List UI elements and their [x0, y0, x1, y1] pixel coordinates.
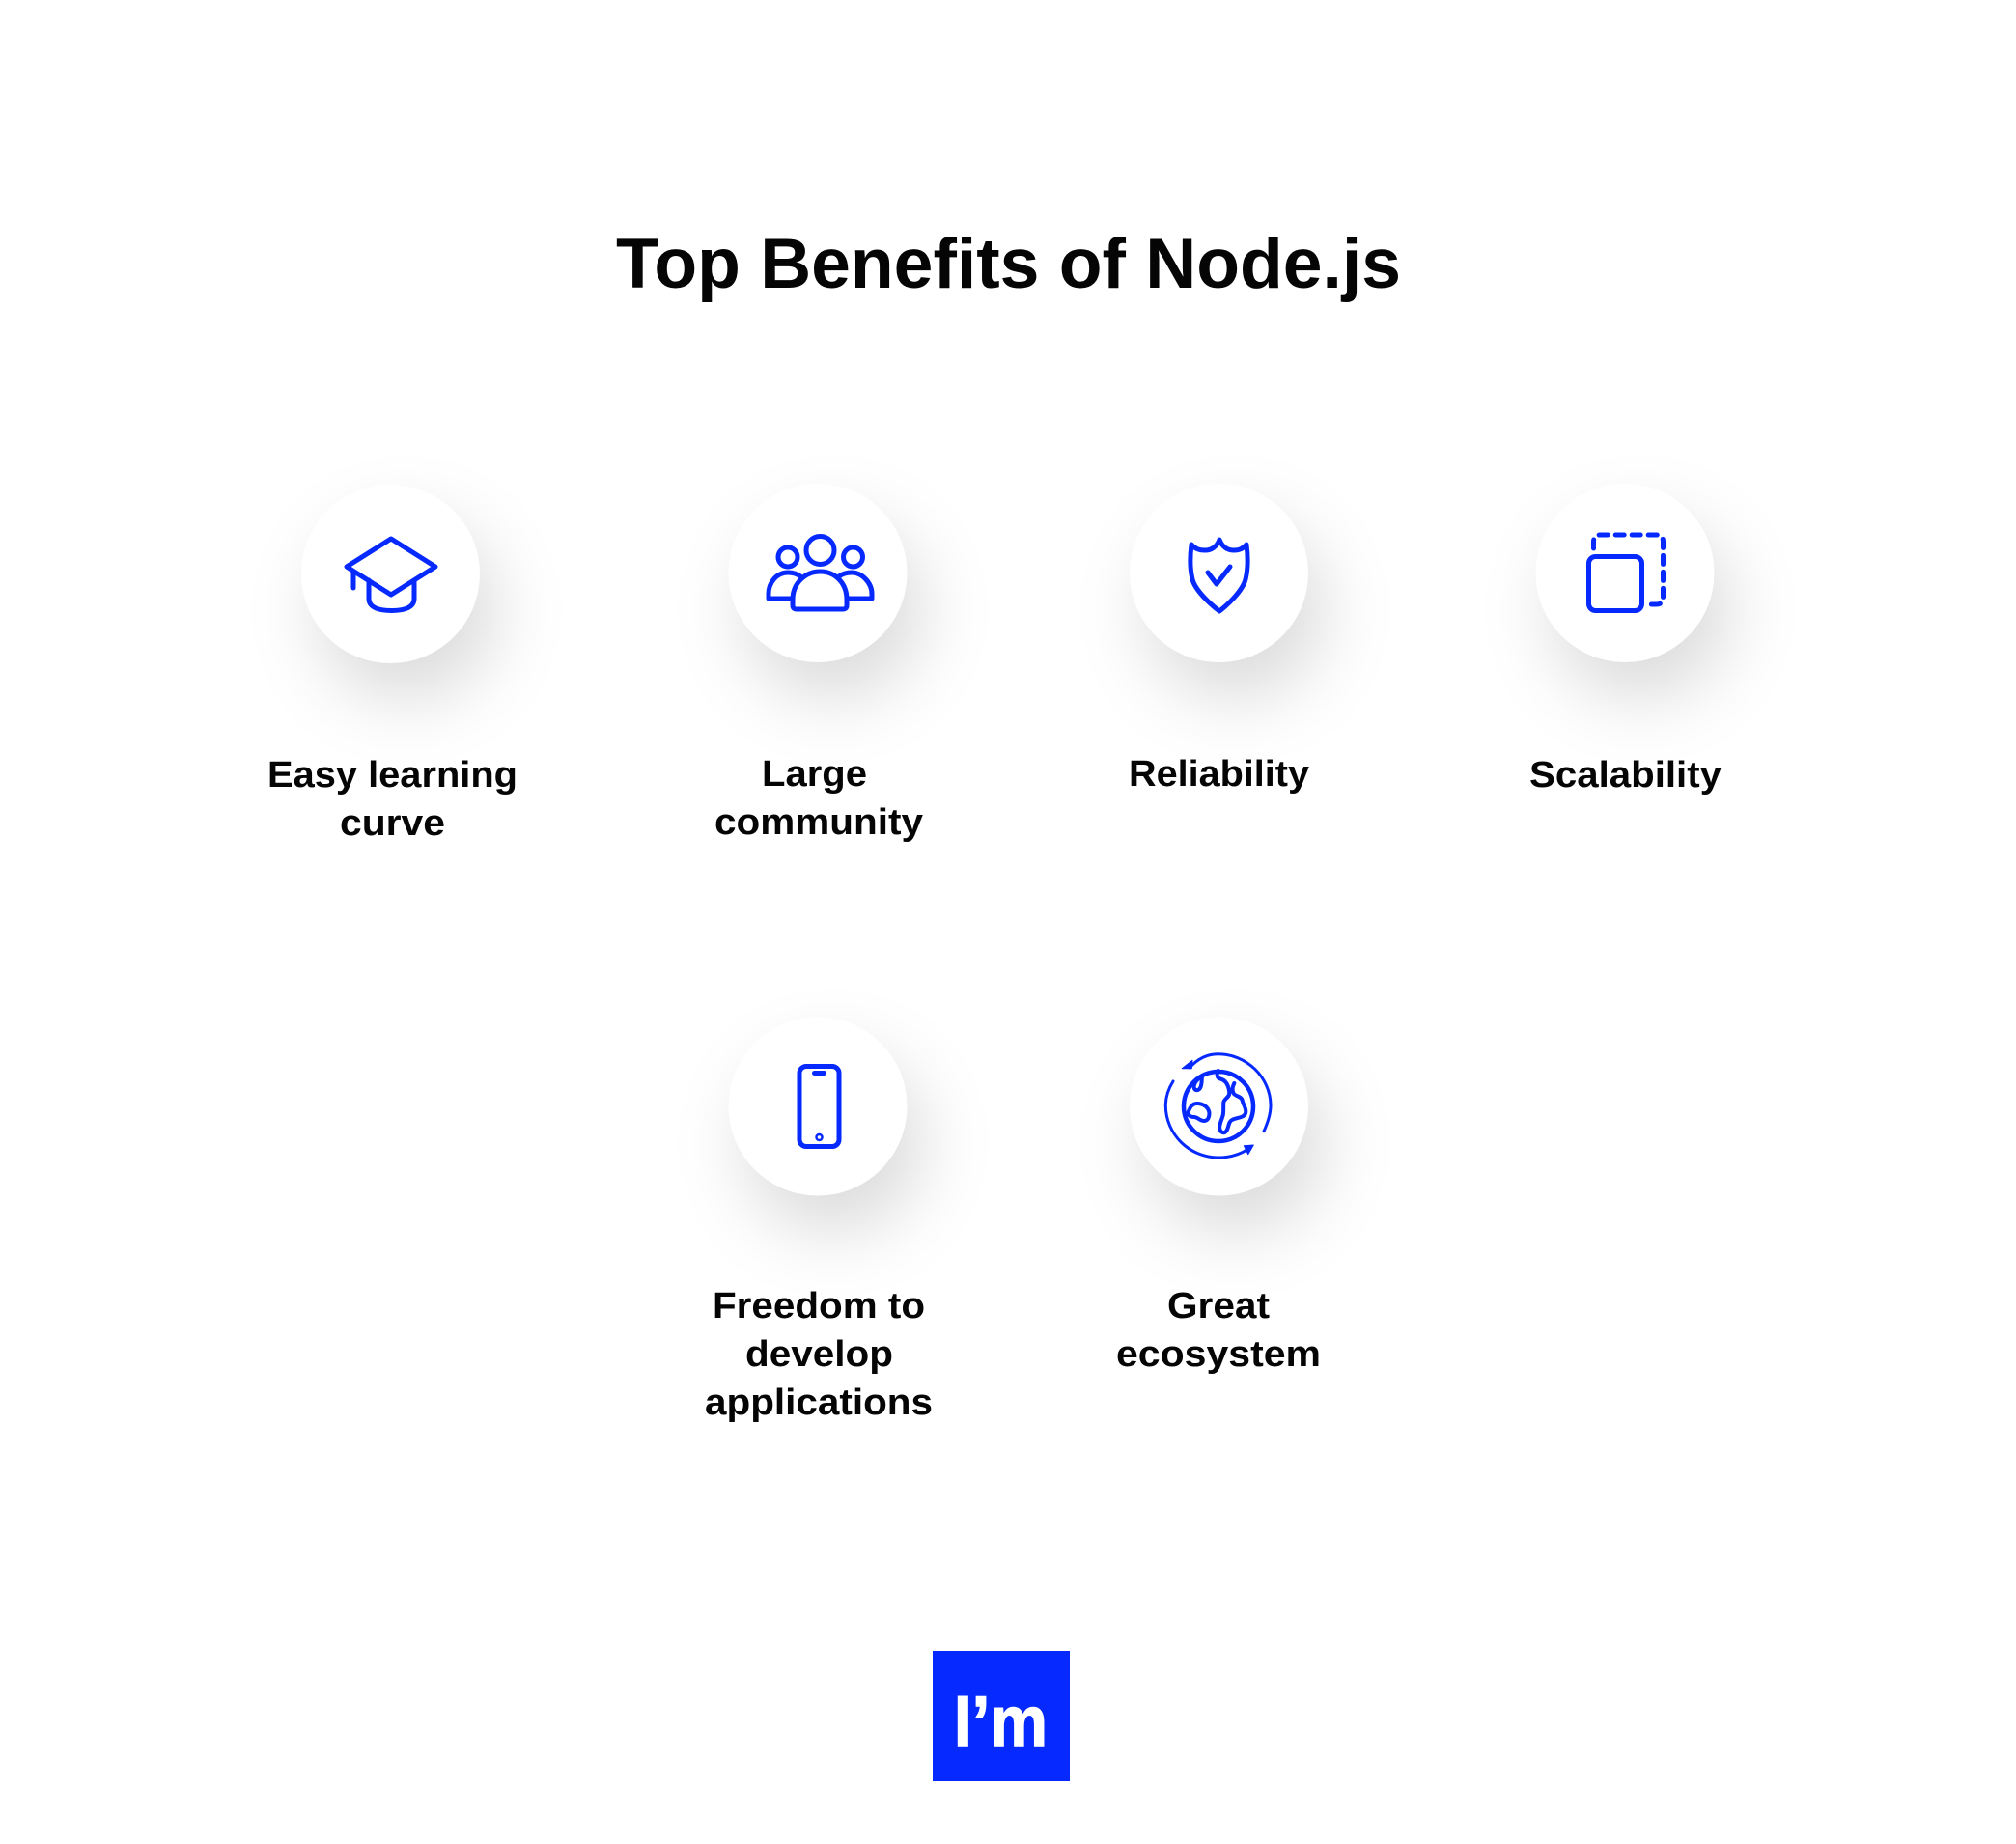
circle with shadow — [1130, 484, 1324, 698]
circle with shadow — [301, 485, 495, 699]
label: easy learning curve: Easy learning — [267, 755, 518, 796]
label: freedom to develop applications: develop — [745, 1334, 893, 1375]
label: freedom to develop applications — [705, 1286, 933, 1423]
label: large community — [714, 754, 923, 843]
icon: shield with check — [1190, 540, 1247, 611]
label: freedom to develop applications: applications — [705, 1383, 933, 1423]
label: great ecosystem — [1116, 1286, 1321, 1375]
label: large community: Large — [762, 754, 867, 795]
label: scalability: Scalability — [1529, 755, 1722, 796]
label: reliability: Reliability — [1129, 754, 1309, 795]
circle with shadow — [1535, 484, 1729, 698]
label: freedom to develop applications: Freedom to — [713, 1286, 925, 1327]
label: easy learning curve: curve — [340, 803, 445, 844]
label: great ecosystem: Great — [1167, 1286, 1270, 1327]
icon: globe with orbit arrows — [1165, 1054, 1271, 1158]
icon: group of people — [769, 537, 872, 609]
panel: scalability — [1529, 484, 1729, 796]
circle with shadow — [728, 1018, 922, 1232]
logo: I’m — [954, 1681, 1048, 1762]
label: great ecosystem: ecosystem — [1116, 1334, 1321, 1375]
panel: easy learning curve — [267, 485, 518, 844]
panel: great ecosystem — [1116, 1018, 1324, 1375]
logo — [933, 1651, 1070, 1781]
icon: smartphone — [799, 1066, 839, 1147]
label: easy learning curve — [267, 755, 518, 844]
circle with shadow — [728, 484, 922, 698]
circle with shadow — [1130, 1018, 1324, 1232]
title: Top Benefits of Node.js — [616, 225, 1401, 303]
panel: freedom to develop applications — [705, 1018, 933, 1423]
icon: scaling rectangles — [1589, 535, 1663, 610]
panel: large community — [714, 484, 923, 843]
panel: reliability — [1129, 484, 1324, 795]
label: large community: community — [714, 802, 923, 843]
icon: graduation cap — [347, 539, 435, 610]
